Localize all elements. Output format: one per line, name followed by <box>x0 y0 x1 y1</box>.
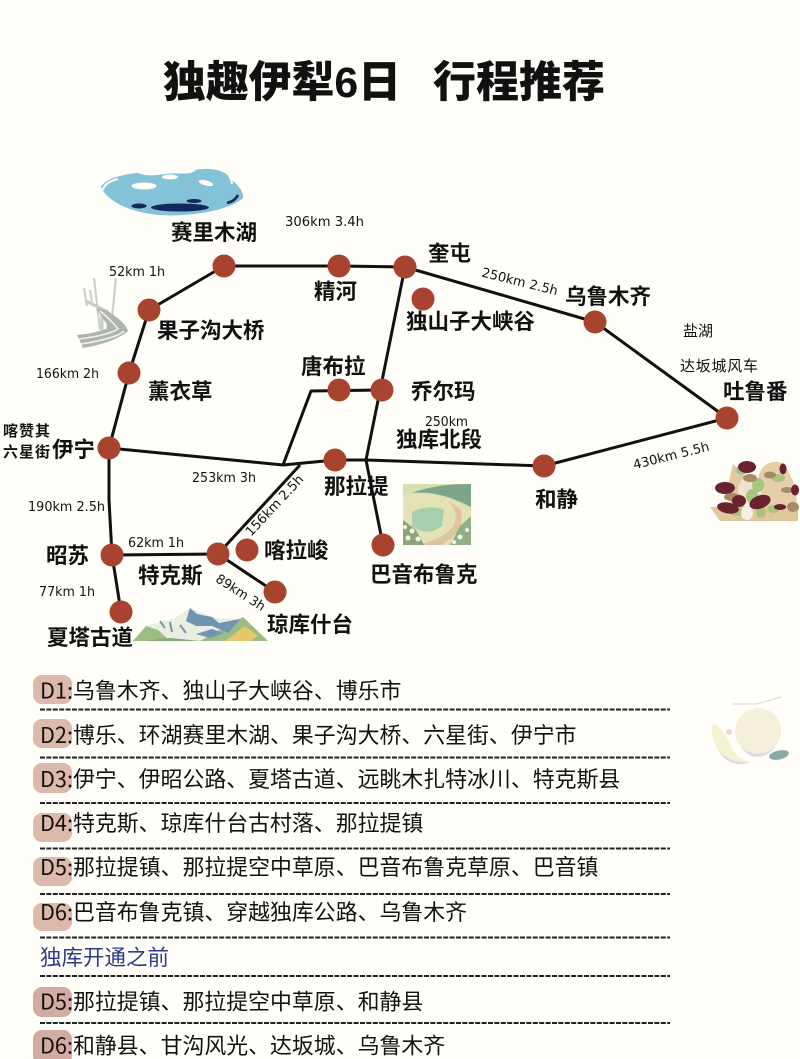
day 6 row: D6: <box>40 895 73 927</box>
place names: 乌鲁木齐 <box>565 285 652 309</box>
place names: 和静 <box>535 488 578 512</box>
distance labels: 430km 5.5h <box>632 440 711 473</box>
day 5 row: 那拉提镇、那拉提空中草原、巴音布鲁克草原、巴音镇 <box>73 855 598 880</box>
distance labels: 250km 2.5h <box>480 266 559 299</box>
place names: 赛里木湖 <box>171 220 257 245</box>
day 1 row: D1: <box>40 674 73 706</box>
distance labels: 190km 2.5h <box>28 500 105 515</box>
distance labels: 306km 3.4h <box>285 215 364 230</box>
place names: 昭苏 <box>46 544 89 568</box>
place names: 奎屯 <box>428 242 471 266</box>
day 2 row: 博乐、环湖赛里木湖、果子沟大桥、六星街、伊宁市 <box>73 723 576 748</box>
place names: 喀拉峻 <box>264 538 329 563</box>
place names: 盐湖 <box>683 323 713 340</box>
title: 独趣伊犁6日 <box>163 59 401 107</box>
place names: 乔尔玛 <box>411 380 476 404</box>
icon: lake <box>101 168 243 216</box>
alternate day 5 row: 那拉提镇、那拉提空中草原、和静县 <box>73 990 423 1014</box>
day 2 row: D2: <box>40 718 73 750</box>
title <box>163 59 605 107</box>
alternate day 6 row: 和静县、甘沟风光、达坂城、乌鲁木齐 <box>73 1034 445 1058</box>
distance labels: 89km 3h <box>213 572 268 615</box>
dashed separators <box>40 710 670 1023</box>
route stops <box>98 254 738 624</box>
place names: 果子沟大桥 <box>157 319 265 343</box>
place names: 特克斯 <box>138 564 203 588</box>
distance labels <box>28 215 711 615</box>
route map <box>3 215 788 650</box>
distance labels: 156km 2.5h <box>243 472 307 540</box>
place names <box>3 220 788 650</box>
place names: 伊宁 <box>52 438 95 462</box>
place names: 唐布拉 <box>301 354 366 379</box>
icon: meadow <box>403 484 471 545</box>
alternate day 5 row: D5: <box>40 984 73 1016</box>
day 6 row: 巴音布鲁克镇、穿越独库公路、乌鲁木齐 <box>73 900 467 925</box>
place names: 薰衣草 <box>148 380 213 404</box>
place names: 六星街 <box>3 444 50 461</box>
title: 行程推荐 <box>433 59 605 107</box>
alternate day 5 row <box>33 984 423 1017</box>
place names: 独山子大峡谷 <box>406 310 535 334</box>
place names: 喀赞其 <box>3 422 50 440</box>
place names: 夏塔古道 <box>47 626 133 650</box>
day 1 row <box>33 674 401 706</box>
place names: 精河 <box>314 280 357 304</box>
distance labels: 52km 1h <box>109 265 165 280</box>
day 4 row: D4: <box>40 806 73 838</box>
distance labels: 253km 3h <box>192 471 256 486</box>
distance labels: 77km 1h <box>39 585 95 600</box>
day 5 row: D5: <box>40 850 73 882</box>
day 1 row: 乌鲁木齐、独山子大峡谷、博乐市 <box>73 678 401 704</box>
icon: nuts <box>710 461 799 521</box>
route lines <box>109 266 727 612</box>
place names: 独库北段 <box>396 427 482 452</box>
day 3 row: 伊宁、伊昭公路、夏塔古道、远眺木扎特冰川、特克斯县 <box>73 767 620 792</box>
day 4 row: 特克斯、琼库什台古村落、那拉提镇 <box>73 811 423 836</box>
place names: 达坂城风车 <box>680 358 758 375</box>
distance labels: 250km <box>425 415 468 430</box>
day 5 row <box>33 850 598 886</box>
icon: melon <box>712 697 790 764</box>
day 6 row <box>33 895 467 931</box>
place names: 那拉提 <box>324 474 389 499</box>
itinerary list <box>33 674 670 1059</box>
day 3 row: D3: <box>40 762 73 794</box>
distance labels: 166km 2h <box>36 367 99 382</box>
sub heading: 独库开通之前 <box>40 946 169 970</box>
place names: 琼库什台 <box>267 612 353 637</box>
distance labels: 62km 1h <box>128 536 184 551</box>
icon: mountain <box>133 608 268 641</box>
day 4 row <box>33 806 423 842</box>
place names: 吐鲁番 <box>723 380 788 404</box>
icon: bridge <box>77 278 128 348</box>
place names: 巴音布鲁克 <box>370 562 478 587</box>
